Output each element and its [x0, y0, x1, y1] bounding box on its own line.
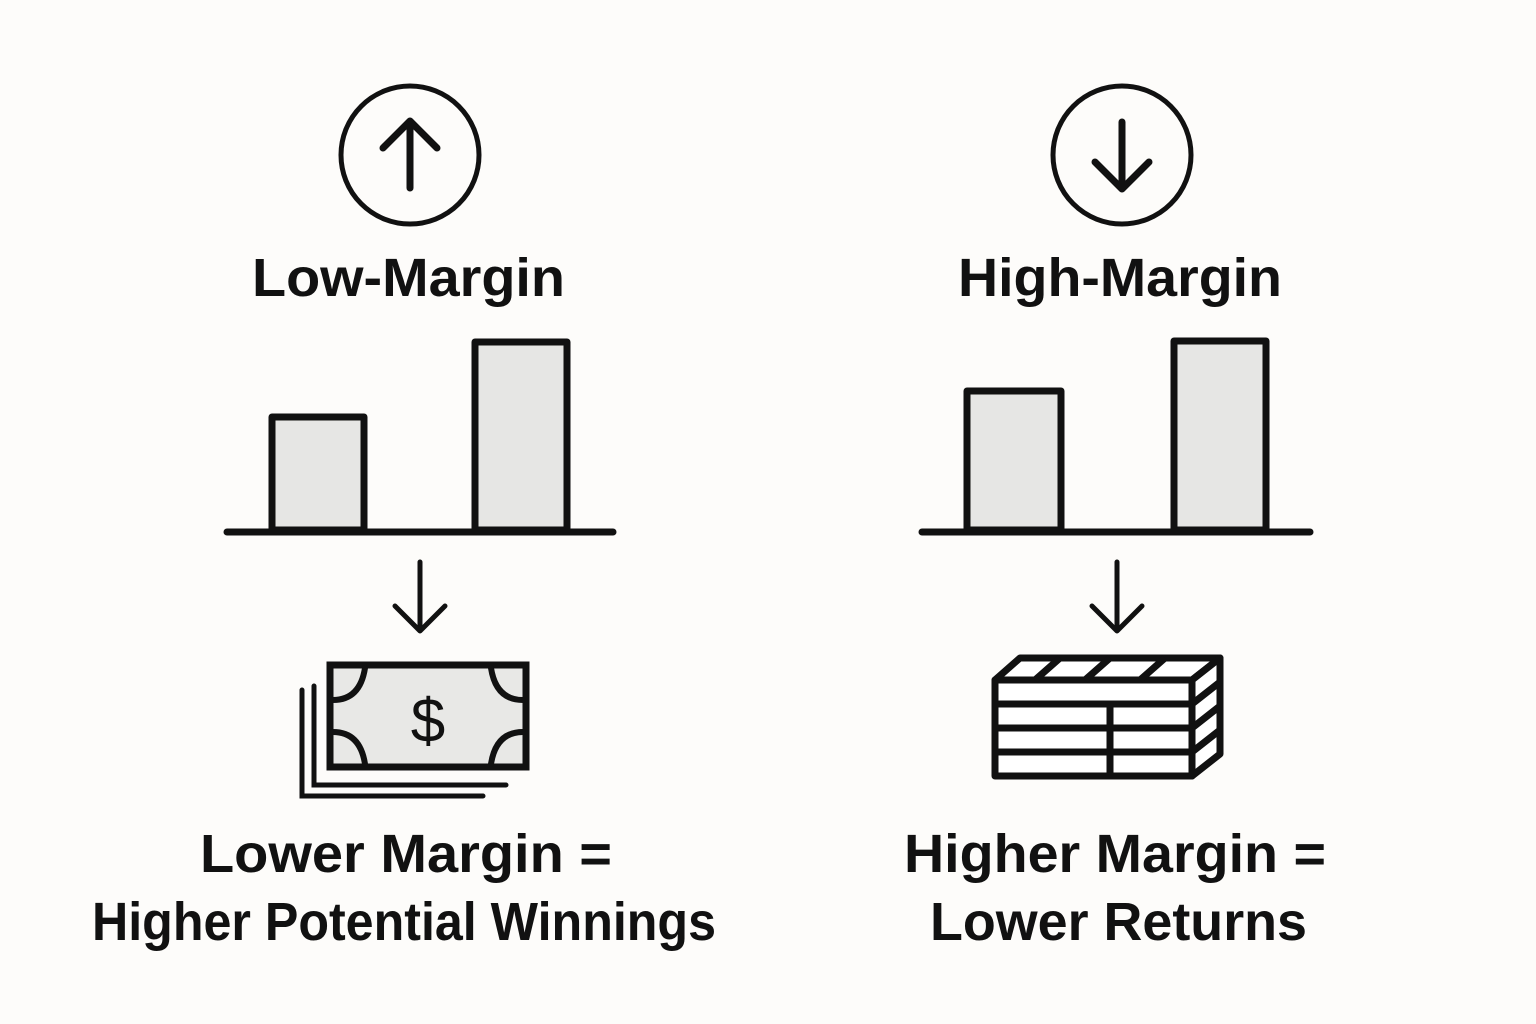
heading: Low-Margin: Low-Margin [252, 248, 565, 308]
icon: down arrow circle [1053, 86, 1191, 224]
bar chart: high-margin [922, 341, 1310, 532]
panel: high-margin [904, 86, 1326, 952]
icon: dollar bill: $ [411, 687, 445, 756]
text: lower margin: Higher Potential Winnings [92, 892, 716, 952]
text: lower margin: Lower Margin = [200, 824, 612, 884]
text: higher margin: Lower Returns [930, 892, 1307, 952]
heading: High-Margin: High-Margin [958, 248, 1282, 308]
icon: dollar bill [302, 665, 526, 796]
text: higher margin [904, 824, 1326, 952]
bar chart: low-margin [227, 342, 613, 532]
icon: cash stack [995, 658, 1220, 776]
panel: low-margin [92, 86, 716, 952]
text: higher margin: Higher Margin = [904, 824, 1326, 884]
arrow: down [395, 562, 445, 631]
arrow: down [1092, 562, 1142, 631]
icon: up arrow circle [341, 86, 479, 224]
text: lower margin [92, 824, 716, 952]
